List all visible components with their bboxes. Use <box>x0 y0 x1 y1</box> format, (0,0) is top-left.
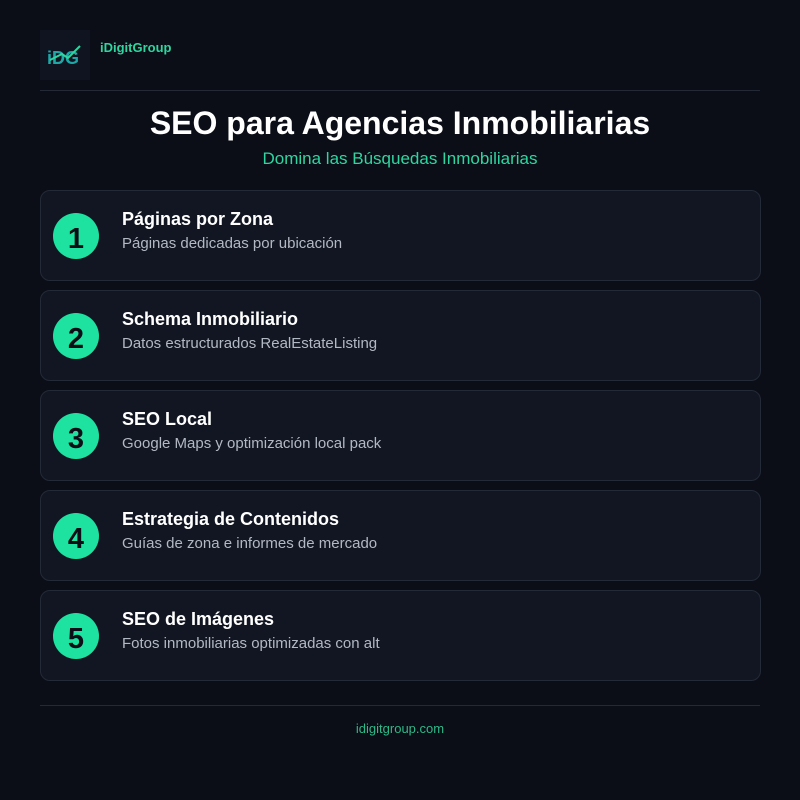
card 1 <box>40 190 761 281</box>
card 2: Schema Inmobiliario <box>122 309 298 329</box>
card 3: Google Maps y optimización local pack <box>122 435 381 452</box>
card 2: Datos estructurados RealEstateListing <box>122 335 377 352</box>
card 5: Fotos inmobiliarias optimizadas con alt <box>122 635 380 652</box>
footer: idigitgroup.com <box>356 721 444 736</box>
subtitle: Domina las Búsquedas Inmobiliarias <box>262 149 537 168</box>
title: SEO para Agencias Inmobiliarias <box>150 105 650 141</box>
logo: iDG <box>47 48 79 68</box>
card 4 <box>40 490 761 581</box>
card 5: 5 <box>68 623 84 655</box>
card 3 <box>40 390 761 481</box>
logo <box>40 30 90 80</box>
card 4: 4 <box>68 523 84 555</box>
card 1: Páginas por Zona <box>122 209 273 229</box>
card 3: 3 <box>68 423 84 455</box>
card 4: Estrategia de Contenidos <box>122 509 339 529</box>
card 5: SEO de Imágenes <box>122 609 274 629</box>
brand name: iDigitGroup <box>100 40 172 55</box>
card 4: Guías de zona e informes de mercado <box>122 535 377 552</box>
card 5 <box>40 590 761 681</box>
card 2: 2 <box>68 323 84 355</box>
card 2 <box>40 290 761 381</box>
card 1: Páginas dedicadas por ubicación <box>122 235 342 252</box>
card 3: SEO Local <box>122 409 212 429</box>
card 1: 1 <box>68 223 84 255</box>
